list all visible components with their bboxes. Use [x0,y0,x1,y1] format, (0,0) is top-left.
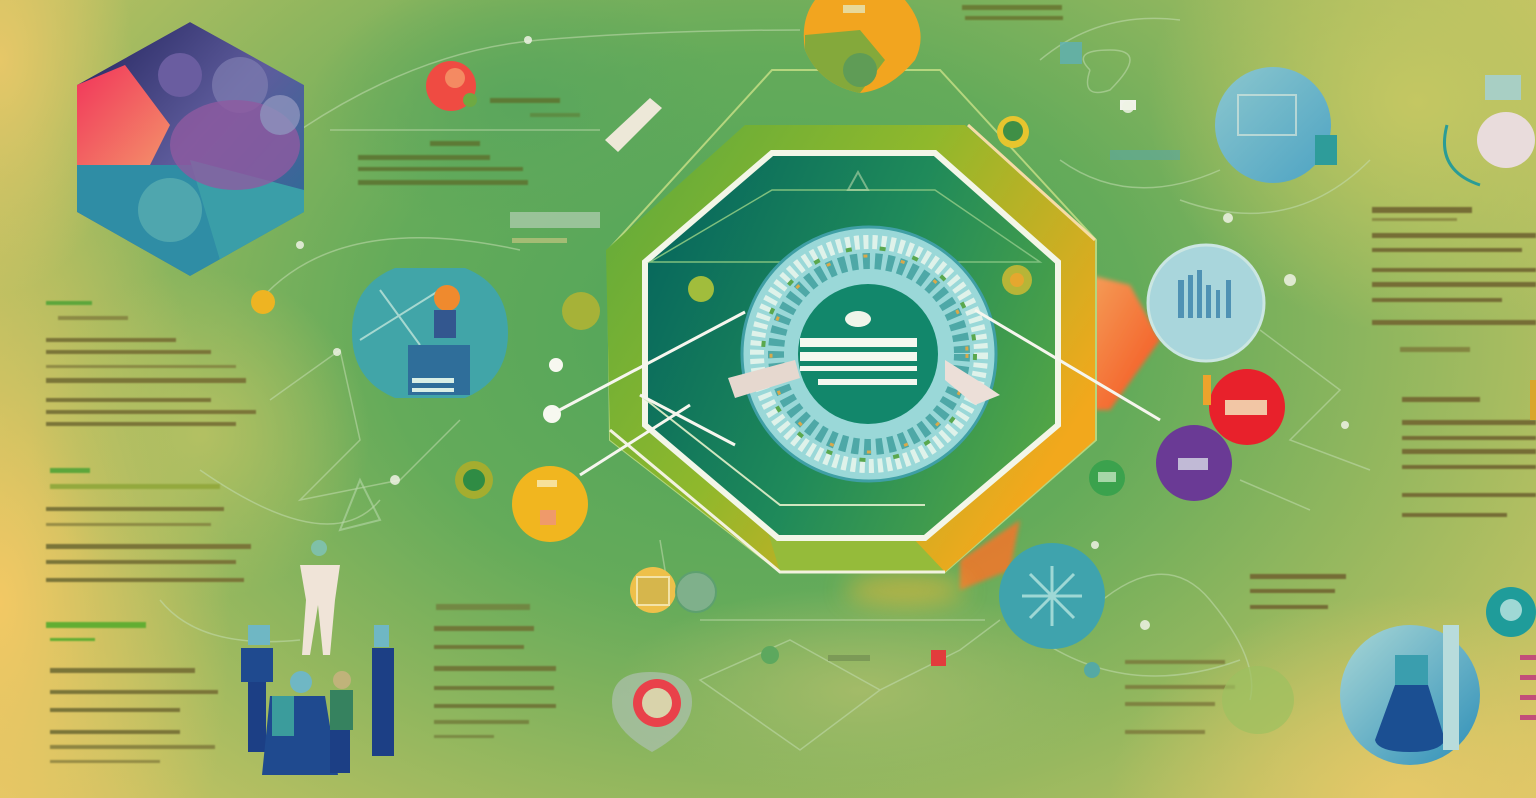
blue chart circle [1148,245,1264,361]
flask circle [1340,587,1536,765]
text block: right middle [1402,397,1536,517]
figure icon [434,285,460,311]
green badge [1089,460,1125,496]
top orange circle [804,0,921,93]
yellow marker right edge [1530,380,1536,420]
figure left [241,625,273,752]
small device top right [1060,42,1180,160]
text block: lower right [1125,574,1346,734]
dial centre text bars [800,338,917,385]
small triangle motif [340,172,868,530]
teal dot [1486,587,1536,637]
central octagon [606,70,1096,572]
connector network lines [160,18,1370,750]
chart bars [1178,270,1231,318]
text block: top [962,5,1063,20]
figures centre [262,671,353,775]
octagon outer outline [608,70,1096,572]
red badge [1203,369,1285,445]
icon: cluster top right edge [1444,75,1535,185]
text block: centre lower [434,604,556,738]
legend right edge [1520,655,1536,720]
icon: small green yellow dot top [997,116,1029,148]
icon: small tag [605,98,662,152]
text block: upper middle-left [358,98,580,185]
inner octagon outline [650,190,1040,262]
small map markers [761,646,1294,734]
node: white dots [543,358,563,423]
teal lens panel [352,268,508,398]
yellow badge [512,466,588,542]
white diagonal connector lines [552,310,1160,475]
tube [1443,625,1459,750]
octagon white border [645,153,1058,538]
dial centre [798,284,938,424]
octagon ring [606,125,1095,572]
figure right [372,625,394,756]
purple badge [1156,425,1232,501]
screen [408,345,470,395]
yellow square node [630,567,716,613]
snowflake teal circle [999,543,1105,649]
orange glow behind octagon [845,275,1160,606]
figure white [300,540,340,655]
hexagon image panel [77,22,304,276]
dial tag right [945,360,1000,405]
icon: yellow dots [251,265,1032,330]
text block: left lower [46,622,218,763]
teal circle top right [1215,67,1337,183]
text block: right upper [1372,207,1536,352]
label box [510,212,600,243]
dial tag left [728,360,800,398]
central dial [728,227,1000,481]
text block: left upper [46,301,256,426]
flask [1375,655,1445,752]
small node dots [296,36,1349,630]
pin badge [612,672,692,752]
icon: red circle top-left [426,61,477,111]
people group [241,540,394,775]
dial centre glyph [845,311,871,327]
text block: left middle [46,468,251,582]
icon: green yellow dot [455,461,493,499]
